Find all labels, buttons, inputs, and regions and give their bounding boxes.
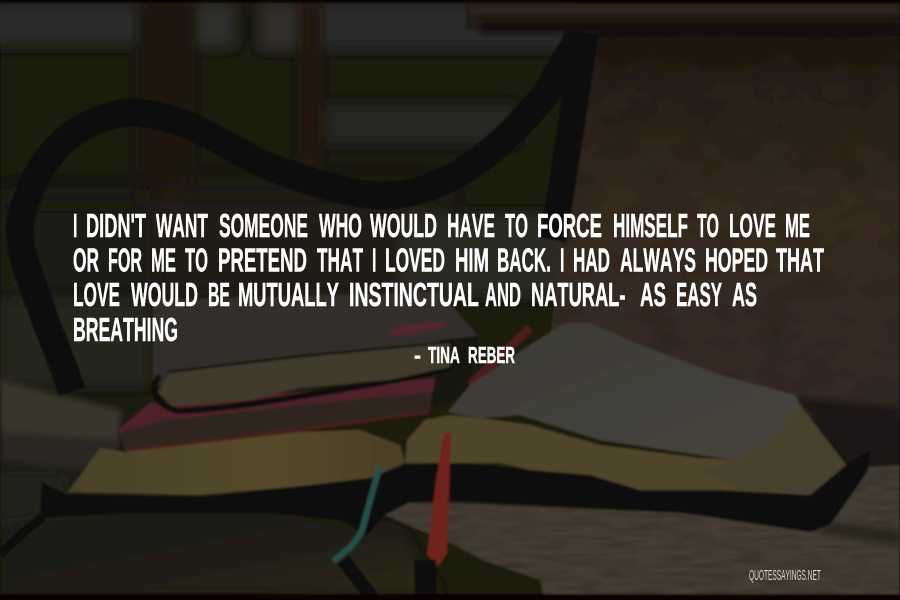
quote line 3: AS	[732, 276, 757, 313]
quote line 1: HAVE	[447, 207, 495, 245]
wooden back wall	[540, 30, 900, 465]
attribution: -	[414, 342, 421, 368]
gray book pages	[158, 343, 450, 406]
quote line 1: WOULD	[370, 207, 437, 244]
quote line 3: WOULD	[131, 276, 198, 313]
quote line 1: ME	[785, 207, 810, 245]
attribution: REBER	[468, 343, 515, 369]
quote line 2: THAT	[317, 241, 363, 279]
quote line 3: INSTINCTUAL	[349, 276, 479, 313]
quote line 1: TO	[697, 206, 719, 245]
right page block	[405, 405, 846, 495]
quote line 3: EASY	[676, 276, 722, 314]
quote line 3: AND	[485, 276, 521, 314]
quote line 3: NATURAL-	[531, 276, 625, 313]
red marker	[387, 321, 447, 335]
quote line 1: I	[73, 206, 77, 245]
bench lower plank	[385, 465, 900, 594]
quote line 2: I	[560, 241, 564, 279]
quote line 2: HAD	[573, 241, 610, 279]
ribbons	[333, 433, 451, 566]
red pen	[470, 328, 530, 385]
stacked books	[118, 321, 478, 452]
quote line 2: PRETEND	[218, 242, 307, 279]
teal ribbon	[333, 467, 380, 561]
quote line 1: DIDN'T	[86, 207, 146, 244]
quote line 2: TO	[185, 241, 208, 279]
quote line 2: HOPED	[705, 242, 768, 279]
attribution	[414, 342, 515, 369]
quote line 2: ALWAYS	[620, 241, 696, 279]
attribution: TINA	[428, 343, 460, 369]
top and bottom black edges	[0, 0, 900, 3]
quote line 1: WANT	[156, 207, 208, 245]
quote line 2: LOVED	[385, 241, 445, 279]
black bench arm	[20, 33, 585, 392]
lower left foliage	[0, 510, 440, 594]
quote line 2: I	[372, 241, 376, 279]
quote line 4: BREATHING	[73, 311, 178, 348]
book straps	[0, 517, 426, 597]
gray book top edge	[168, 342, 452, 372]
dark gap behind pen	[432, 336, 478, 408]
quote text	[73, 206, 824, 348]
quote line 2: ME	[151, 241, 176, 279]
left page block	[68, 430, 405, 495]
right page top	[448, 323, 800, 460]
quote line 2: HIM	[455, 242, 489, 279]
quote line 1: LOVE	[729, 207, 776, 245]
quote line 1	[73, 206, 810, 245]
quote line 2	[73, 241, 824, 279]
red ribbon	[427, 433, 451, 566]
book cover	[40, 450, 870, 535]
red book	[118, 378, 435, 452]
quote line 1: TO	[505, 207, 528, 245]
gray book cover backdrop	[153, 292, 478, 388]
top beam	[466, 4, 900, 33]
quote line 3	[73, 275, 757, 314]
right page fore edge	[700, 405, 846, 495]
quote line 1: WHO	[319, 207, 362, 244]
watermark: QUOTESSAYINGS.NET	[749, 568, 821, 584]
quote line 2: FOR	[108, 241, 142, 279]
quote line 1: FORCE	[537, 207, 602, 244]
quote line 1: HIMSELF	[613, 207, 688, 245]
quote line 3: BE	[208, 275, 230, 314]
quote line 3: AS	[640, 276, 666, 313]
quote line 2: OR	[73, 241, 99, 279]
quote line 2: THAT	[776, 242, 824, 279]
quote line 3: LOVE	[73, 276, 120, 314]
blurred park background	[0, 0, 570, 530]
open book	[40, 323, 870, 535]
bench left plank	[0, 380, 122, 472]
quote line 1: SOMEONE	[219, 207, 308, 245]
gray book lower cover	[154, 368, 452, 411]
quote line 2: BACK.	[497, 241, 551, 279]
quote line 3: MUTUALLY	[238, 276, 339, 313]
